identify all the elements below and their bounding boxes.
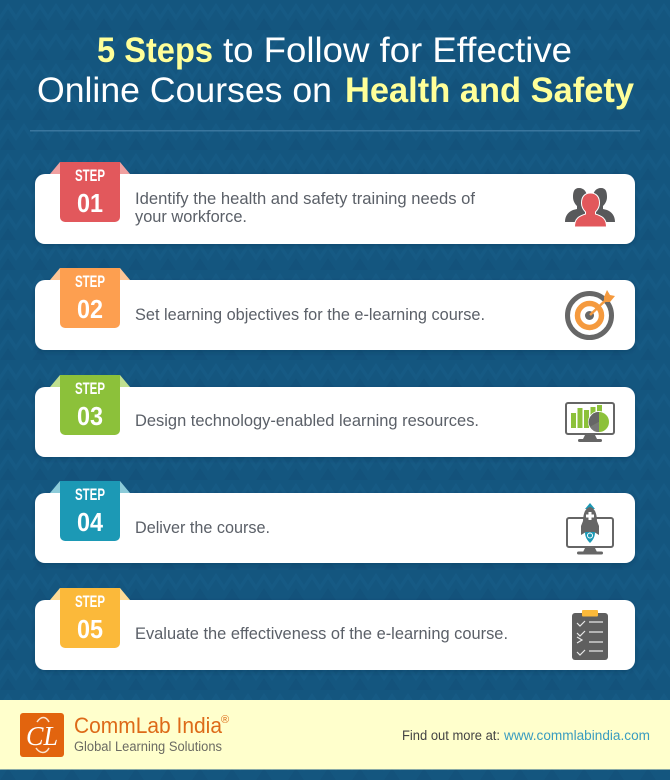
step tab 04: STEP <box>75 486 105 504</box>
brand name: CommLab India <box>74 713 222 738</box>
registered mark: ® <box>221 714 229 726</box>
step tab 02: 02 <box>77 294 103 324</box>
icon: target <box>568 290 615 338</box>
step tab 04: 04 <box>77 507 103 537</box>
icon: people group <box>565 188 615 227</box>
step tab 01: 01 <box>77 188 103 218</box>
title: 5 Steps <box>97 31 213 70</box>
step tab 01 <box>50 162 130 222</box>
footer link text: Find out more at: <box>402 728 500 743</box>
footer link text: www.commlabindia.com <box>503 728 650 743</box>
step 05 text: Evaluate the effectiveness of the e-learning course. <box>135 625 508 643</box>
step 02 text: Set learning objectives for the e-learning course. <box>135 306 485 324</box>
logo: CommLab India: CL <box>26 721 58 751</box>
step tab 01: STEP <box>75 167 105 185</box>
step 03 text: Design technology-enabled learning resources. <box>135 412 479 430</box>
tagline: Global Learning Solutions <box>74 739 222 754</box>
step 01 text: your workforce. <box>135 208 247 226</box>
panel: step 02 <box>35 268 635 350</box>
footer link text <box>402 728 650 743</box>
panel: step 05 <box>35 588 635 670</box>
title: Health and Safety <box>345 71 635 110</box>
step tab 05: 05 <box>77 614 103 644</box>
panel: step 01 <box>35 162 635 244</box>
step 01 text: Identify the health and safety training needs of <box>135 190 475 208</box>
step tab 05: STEP <box>75 593 105 611</box>
step tab 03: STEP <box>75 380 105 398</box>
panel: step 03 <box>35 375 635 457</box>
step tab 05 <box>50 588 130 648</box>
step tab 04 <box>50 481 130 541</box>
step tab 03: 03 <box>77 401 103 431</box>
icon: rocket on monitor <box>567 503 613 554</box>
footer band <box>0 700 670 770</box>
icon: monitor with charts <box>566 403 614 442</box>
step 04 text: Deliver the course. <box>135 519 270 537</box>
title <box>37 31 635 110</box>
icon: checklist clipboard <box>572 610 608 660</box>
step 01 text <box>135 190 475 226</box>
step tab 02 <box>50 268 130 328</box>
title: Online Courses on <box>37 71 332 110</box>
step tab 02: STEP <box>75 273 105 291</box>
step tab 03 <box>50 375 130 435</box>
title: to Follow for Effective <box>223 31 572 70</box>
logo: CommLab India <box>20 713 64 757</box>
panel: step 04 <box>35 481 635 563</box>
